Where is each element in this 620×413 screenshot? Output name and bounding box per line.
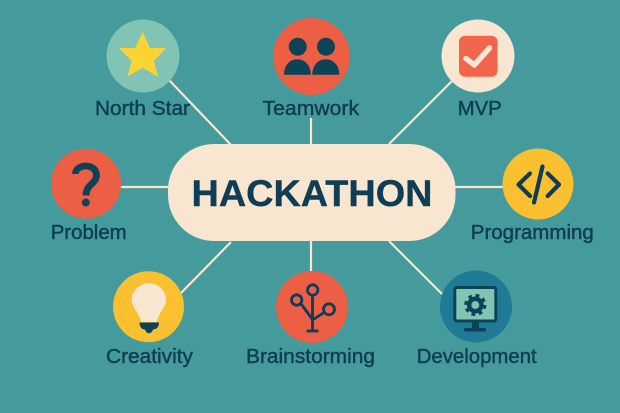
icon: branching idea — [292, 285, 334, 331]
node: Problem — [51, 149, 127, 244]
icon: monitor with gear — [455, 288, 496, 332]
icon: code brackets — [518, 166, 559, 202]
label: Development: Development — [417, 345, 537, 368]
label: North Star: North Star — [95, 97, 190, 120]
central pill: HACKATHON: HACKATHON — [192, 172, 432, 214]
icon: people — [284, 38, 339, 75]
node: Development — [417, 270, 537, 368]
icon: question mark — [76, 166, 96, 206]
icon: light bulb — [132, 283, 166, 333]
node: Programming — [471, 148, 594, 244]
node: Creativity — [106, 271, 194, 368]
node: North Star — [95, 20, 190, 120]
node: Brainstorming — [246, 271, 375, 368]
node: MVP — [442, 20, 514, 120]
label: MVP: MVP — [458, 97, 502, 120]
central pill: HACKATHON — [168, 144, 456, 241]
label: Teamwork: Teamwork — [263, 97, 360, 120]
label: Creativity: Creativity — [106, 345, 194, 368]
label: Problem: Problem — [51, 221, 127, 244]
label: Brainstorming: Brainstorming — [246, 345, 375, 368]
label: Programming: Programming — [471, 221, 594, 244]
icon: checkbox — [459, 36, 498, 77]
icon: star — [119, 32, 166, 77]
node: Teamwork — [263, 18, 360, 120]
